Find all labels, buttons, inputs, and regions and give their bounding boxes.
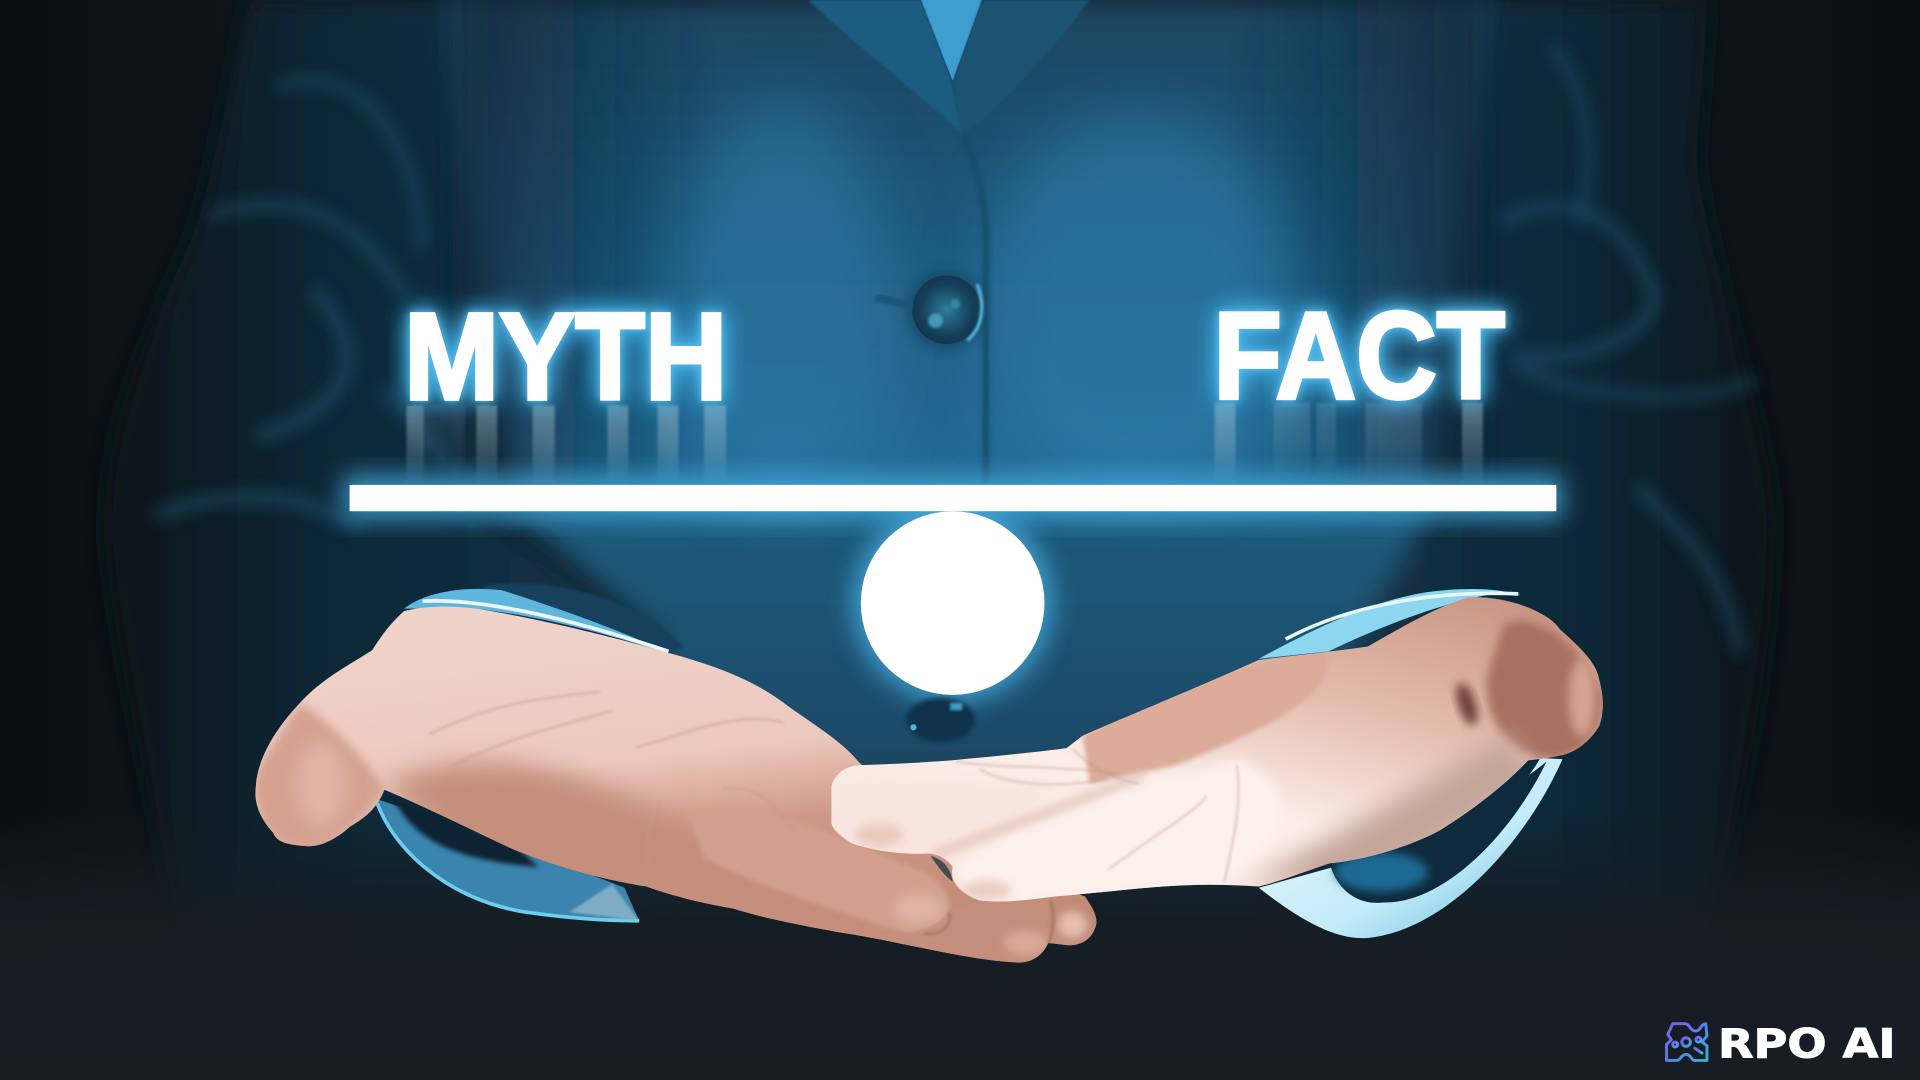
logo icon <box>1667 1024 1707 1060</box>
right lapel <box>953 0 1090 135</box>
lower outer palm shading <box>1249 735 1543 887</box>
shirt collar <box>921 0 982 81</box>
scale glow <box>343 475 1562 703</box>
fingertips <box>894 894 943 923</box>
suit jacket torso <box>443 0 1491 1080</box>
cuff lower fold <box>375 798 639 921</box>
ring finger shadow <box>908 916 946 936</box>
finger separation <box>924 900 1053 943</box>
right sleeve <box>1273 0 1776 1080</box>
logo: RPO AI: RPO AI <box>1718 1021 1896 1067</box>
bright lower finger <box>953 759 1281 906</box>
jacket lower button <box>906 698 975 742</box>
thumb shading <box>255 703 384 848</box>
jacket front opening <box>962 132 986 484</box>
bright upper finger <box>842 836 923 854</box>
cuff lower fold <box>1259 758 1562 938</box>
right hand <box>831 597 1604 906</box>
reflections under fact <box>1215 403 1483 484</box>
scale beam <box>350 485 1556 511</box>
left hand <box>255 607 1097 980</box>
scale fulcrum circle <box>861 511 1044 695</box>
fingertips <box>855 823 904 847</box>
lower palm shading <box>384 762 1090 980</box>
thumb shading <box>1487 621 1604 760</box>
finger shadow <box>933 774 1145 855</box>
index finger <box>693 818 950 932</box>
logo: RPO AI <box>1667 1021 1896 1067</box>
right cuff <box>1259 589 1562 938</box>
myth label: MYTH <box>404 288 727 426</box>
cuff top edge <box>1259 589 1521 659</box>
left sleeve <box>104 0 686 1080</box>
palm creases <box>428 690 784 762</box>
cuff sleeve edge <box>484 583 683 655</box>
left lapel <box>808 0 962 135</box>
thumb web shadow <box>1452 680 1482 728</box>
jacket upper button <box>876 269 987 350</box>
finger creases <box>955 749 1238 882</box>
left cuff <box>375 583 683 921</box>
reflections under myth <box>407 405 726 484</box>
upper finger <box>1082 647 1328 784</box>
finger gap <box>931 856 953 882</box>
fact label: FACT <box>1213 287 1505 425</box>
cuff top edge <box>404 589 671 655</box>
lower shadow area <box>0 808 1920 1080</box>
